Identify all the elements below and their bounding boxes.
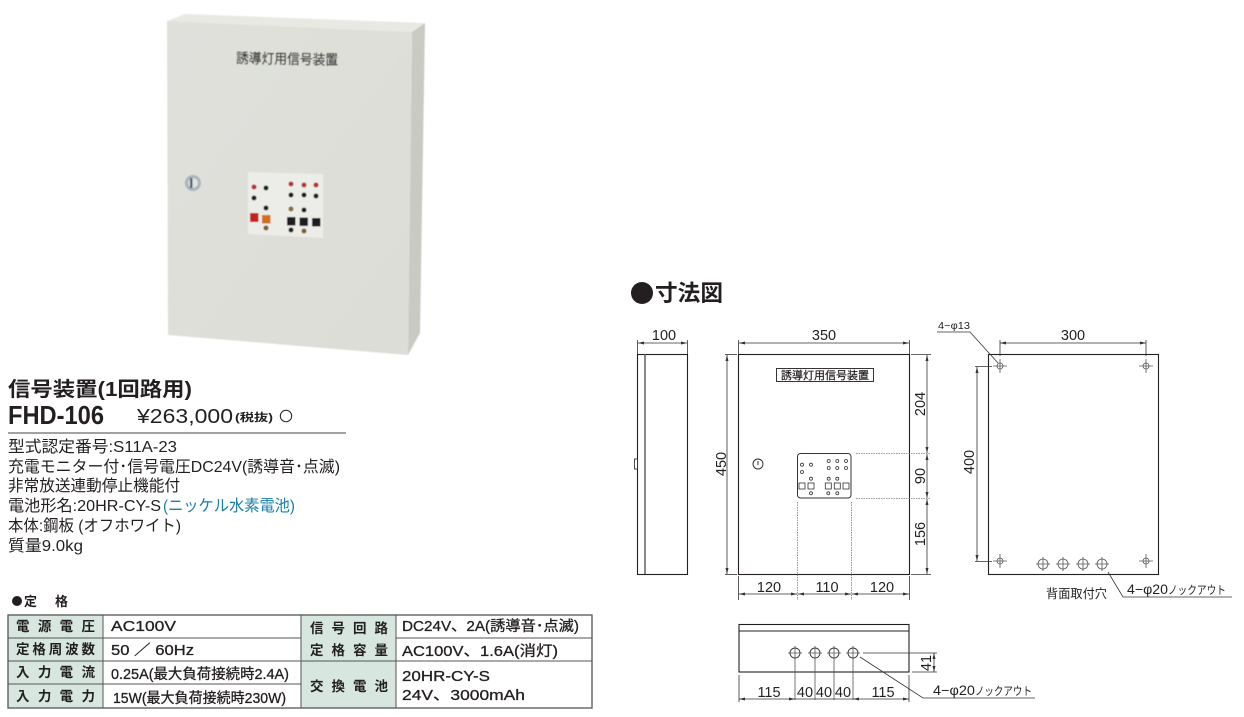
specifications heading: 定 [24, 594, 37, 609]
specification lines: 型式認定番号:S11A-23 [8, 438, 177, 456]
table values left: 0.25A(最大負荷接続時2.4A) [111, 666, 289, 683]
table values right: AC100V、1.6A(消灯) [402, 643, 558, 660]
key symbol [753, 459, 763, 469]
table row headers left: 電源電圧 [16, 615, 95, 635]
cabinet top face [167, 14, 425, 32]
dimension 100: 100 [652, 328, 676, 344]
table values left: 50 ／ 60Hz [111, 642, 194, 659]
specification lines: 電池形名:20HR-CY-S [8, 497, 161, 515]
dimensions 115 40 40 40 115: 40 [835, 685, 851, 701]
table values left [111, 619, 289, 707]
table row headers right: 定格容量 [310, 639, 388, 659]
callout bottom knockouts: ノックアウト [975, 685, 1032, 698]
table values right: 20HR-CY-S [402, 669, 490, 685]
photo: signal device cabinet [167, 14, 425, 355]
dimension drawing heading: 寸法図 [655, 281, 723, 306]
dimension 41 [863, 653, 937, 672]
price: ¥263,000 [136, 406, 233, 428]
control panel [248, 172, 323, 238]
bottom knockouts [788, 646, 860, 700]
dimensions 120 110 120: 120 [870, 580, 894, 596]
table row headers right [310, 617, 388, 695]
dimensions 115 40 40 40 115 [739, 675, 909, 702]
mounting holes [993, 359, 1153, 568]
product text block [8, 378, 346, 555]
table row headers left: 定格周波数 [16, 638, 96, 658]
table values right [402, 618, 579, 704]
key lock [185, 175, 201, 191]
dimensions 115 40 40 40 115: 40 [816, 685, 832, 701]
specification lines: 非常放送連動停止機能付 [8, 477, 180, 495]
specifications table [8, 615, 592, 708]
callout hole diameter [937, 321, 998, 363]
dimensions 120 110 120 [738, 502, 910, 600]
table values left: 15W(最大負荷接続時230W) [113, 690, 286, 707]
dimension 400: 400 [962, 450, 978, 474]
specification lines [8, 438, 340, 555]
drawing: front view [714, 328, 931, 600]
dimension 100 [638, 328, 688, 354]
table row headers right: 信号回路 [310, 617, 388, 637]
dimensions 120 110 120: 120 [757, 580, 781, 596]
table values left: AC100V [111, 619, 176, 635]
dimensions 204 90 156: 156 [913, 522, 929, 546]
cabinet side face [408, 23, 425, 355]
drawing: rear view [937, 321, 1232, 601]
dimension 41: 41 [919, 655, 935, 671]
table row headers left: 入力電力 [16, 685, 95, 705]
specifications heading: 格 [55, 594, 68, 609]
callout rear knockouts: 4−φ20 [1127, 581, 1168, 597]
specification lines: (ニッケル水素電池) [163, 497, 295, 515]
dimensions 204 90 156: 90 [913, 468, 929, 484]
front nameplate: 誘導灯用信号装置 [781, 368, 869, 382]
knockouts [1036, 557, 1109, 571]
panel outline [798, 454, 851, 498]
rear mounting label: 背面取付穴 [1046, 587, 1107, 601]
dimensions 204 90 156 [856, 354, 931, 574]
callout rear knockouts [1108, 572, 1232, 597]
dimensions 120 110 120: 110 [815, 580, 839, 596]
specification lines: 本体:鋼板 (オフホワイト) [8, 517, 181, 535]
cabinet nameplate text: 誘導灯用信号装置 [236, 50, 338, 68]
dimension 350: 350 [812, 328, 836, 344]
table row headers right: 交換電池 [310, 675, 388, 695]
dimensions 115 40 40 40 115: 115 [871, 685, 895, 701]
product name: 信号装置(1回路用) [8, 378, 192, 401]
dimension 450: 450 [714, 452, 730, 476]
table row headers left [16, 615, 96, 705]
model number: FHD-106 [8, 400, 104, 430]
specification lines: 質量9.0kg [8, 537, 83, 555]
table values right: 24V、3000mAh [402, 688, 525, 704]
specifications heading [12, 594, 68, 609]
callout bottom knockouts: 4−φ20 [933, 682, 975, 698]
drawing: side view [634, 328, 688, 574]
callout hole diameter: 4−φ13 [938, 321, 970, 332]
open circle mark [280, 410, 292, 422]
drawing: bottom view [739, 624, 1035, 702]
specification lines: 充電モニター付･信号電圧DC24V(誘導音･点滅) [8, 457, 340, 476]
callout rear knockouts: ノックアウト [1168, 584, 1226, 597]
table row headers left: 入力電流 [16, 661, 96, 681]
cabinet front face [167, 21, 412, 355]
dimensions 115 40 40 40 115: 40 [797, 685, 813, 701]
callout bottom knockouts [860, 657, 1035, 698]
tax note: (税抜) [235, 410, 273, 424]
dimensions 204 90 156: 204 [913, 392, 929, 416]
table values right: DC24V、2A(誘導音･点滅) [402, 618, 579, 635]
dimensions 115 40 40 40 115: 115 [757, 685, 781, 701]
dimension 300: 300 [1061, 328, 1085, 344]
